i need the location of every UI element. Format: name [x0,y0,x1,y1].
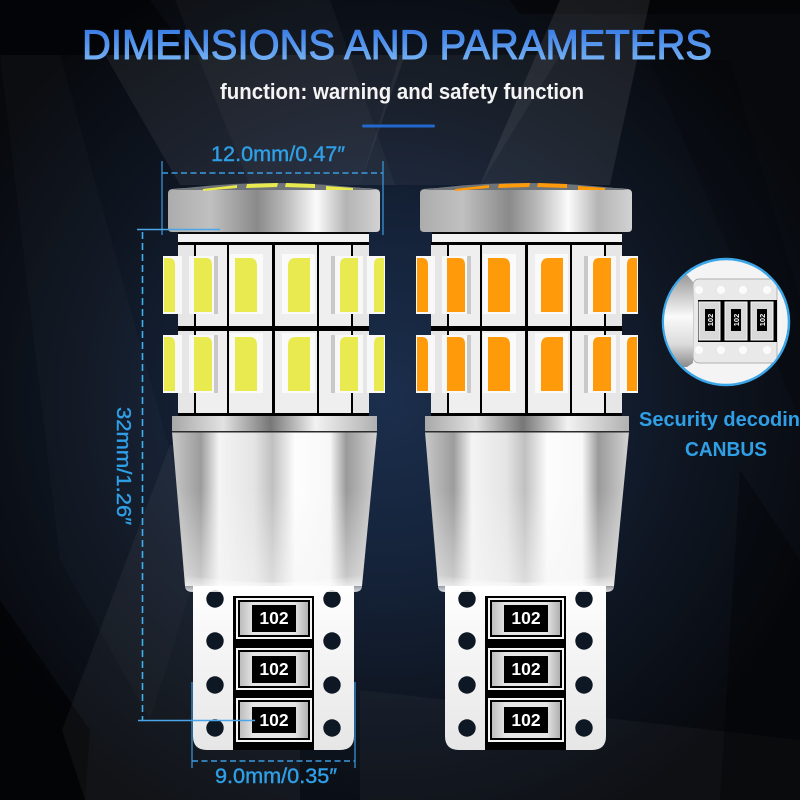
inset: CANBUS resistor close-up: 102 [732,314,741,326]
resistor 3 [236,698,312,742]
resistor 2 [488,648,564,690]
inset: CANBUS resistor close-up: 102 [758,314,767,326]
white LED bulb [163,183,385,750]
resistor 3 [488,698,564,742]
resistor 1: 102 [511,608,541,628]
resistor 1: 102 [259,608,289,628]
resistor 2: 102 [259,659,289,679]
resistor 3: 102 [511,710,541,730]
dimension: base width: 9.0mm/0.35″ [215,765,338,788]
LED board [431,242,622,416]
LED row 1 [163,254,385,314]
LED row 2 [163,333,385,393]
resistor 1 [488,598,564,639]
label: CANBUS: CANBUS [685,439,767,461]
label: security decoding: Security decodin [639,409,800,431]
resistor 2: 102 [511,659,541,679]
LED row 2 [416,333,638,393]
resistor 3: 102 [259,710,289,730]
amber LED bulb [416,183,638,750]
metal cap [420,185,632,232]
metal body [425,416,629,592]
title: DIMENSIONS AND PARAMETERS [82,21,712,68]
wedge base [193,585,354,750]
metal body [172,416,377,592]
dimension: cap width: 12.0mm/0.47″ [211,143,346,166]
subtitle: function: warning and safety function [220,79,584,104]
dimension: bulb length: 32mm/1.26″ [112,407,134,525]
white band [432,232,622,242]
white band [178,232,369,242]
LED row 1 [416,254,638,314]
metal cap [168,185,380,232]
top LEDs [422,183,630,191]
inset: CANBUS resistor close-up: 102 [706,314,715,326]
dimension: bulb length [112,230,255,720]
accent line [362,124,435,128]
dimension: base width [192,682,355,788]
wedge base [445,585,606,750]
top LEDs [170,183,378,191]
LED board [178,242,369,416]
resistor 1 [236,598,312,639]
resistor 2 [236,648,312,690]
inset: CANBUS resistor close-up [663,259,789,385]
dimension: cap width [162,143,383,235]
